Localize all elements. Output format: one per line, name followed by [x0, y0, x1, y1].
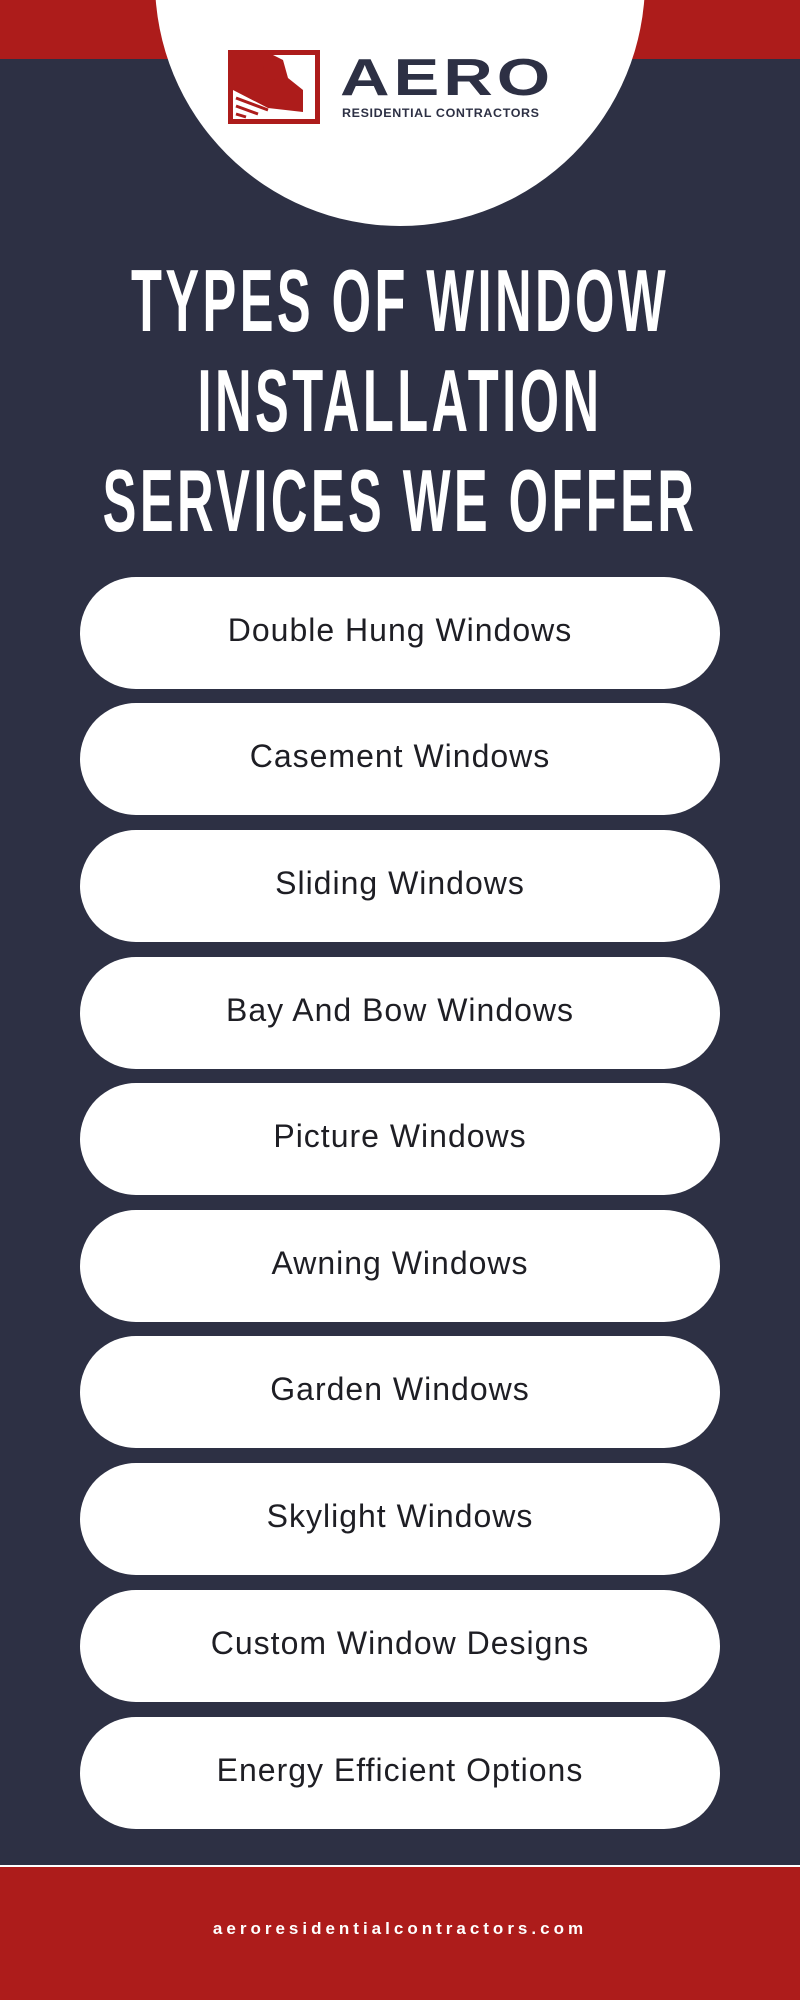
tagline: RESIDENTIAL CONTRACTORS — [342, 106, 540, 120]
pill: Garden Windows — [80, 1336, 720, 1448]
pill: Garden Windows: Garden Windows — [270, 1370, 530, 1406]
pill: Custom Window Designs: Custom Window Designs — [211, 1624, 589, 1660]
pill: Skylight Windows: Skylight Windows — [267, 1498, 533, 1534]
pill: Casement Windows: Casement Windows — [250, 738, 550, 774]
logo — [228, 49, 554, 124]
pill: Awning Windows: Awning Windows — [271, 1244, 529, 1280]
pill: Casement Windows — [80, 703, 720, 815]
title: TYPES OF WINDOW — [131, 251, 669, 350]
brand name: AERO — [340, 49, 554, 107]
pill: Skylight Windows — [80, 1463, 720, 1575]
pill: Bay And Bow Windows — [80, 957, 720, 1069]
pill: Sliding Windows — [80, 830, 720, 942]
title: INSTALLATION — [198, 351, 602, 450]
footer: aeroresidentialcontractors.com — [213, 1919, 587, 1938]
list of services — [80, 577, 720, 1829]
pill: Bay And Bow Windows: Bay And Bow Windows — [226, 992, 574, 1028]
pill: Energy Efficient Options — [80, 1717, 720, 1829]
pill: Double Hung Windows: Double Hung Windows — [228, 612, 572, 648]
pill: Picture Windows: Picture Windows — [273, 1118, 527, 1154]
pill: Double Hung Windows — [80, 577, 720, 689]
footer — [0, 1865, 800, 2000]
pill: Custom Window Designs — [80, 1590, 720, 1702]
icon: roofer — [228, 50, 320, 124]
pill: Energy Efficient Options: Energy Efficient Options — [217, 1752, 583, 1788]
title: SERVICES WE OFFER — [103, 451, 697, 550]
pill: Sliding Windows: Sliding Windows — [275, 864, 525, 900]
pill: Awning Windows — [80, 1210, 720, 1322]
pill: Picture Windows — [80, 1083, 720, 1195]
title — [103, 251, 697, 550]
